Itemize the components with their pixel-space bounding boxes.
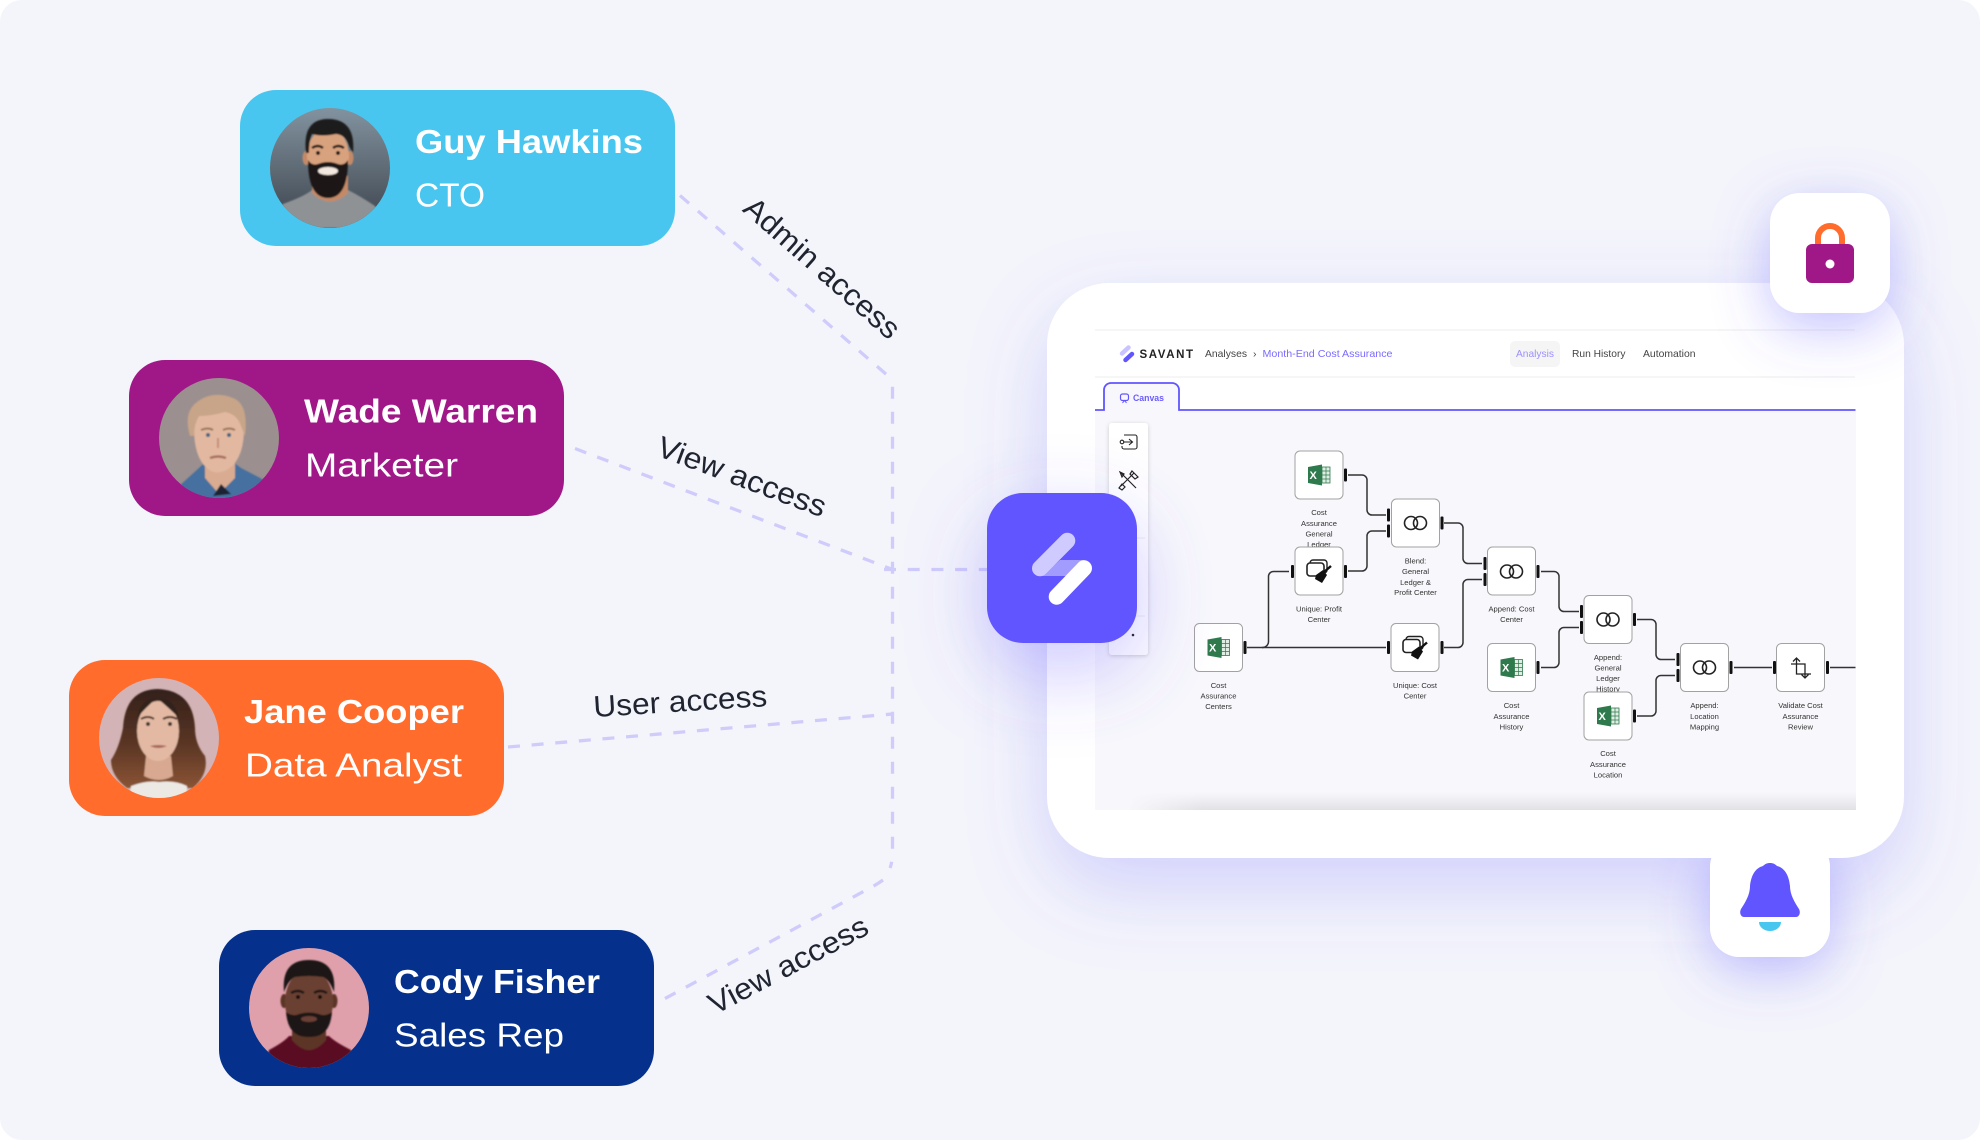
node: cost assurance general ledger: Ledger bbox=[1307, 540, 1331, 549]
canvas area bbox=[1095, 411, 1856, 810]
node: cost assurance general ledger bbox=[1295, 451, 1347, 549]
node: validate cost assurance review bbox=[1773, 644, 1829, 732]
node: cost assurance history: Cost bbox=[1504, 701, 1520, 710]
node: unique profit center bbox=[1291, 547, 1347, 624]
workflow wires bbox=[1247, 475, 1856, 716]
node: blend bbox=[1387, 499, 1444, 597]
panel: app window bbox=[1047, 283, 1904, 858]
node: unique cost center bbox=[1387, 624, 1444, 700]
icon: input bbox=[1120, 435, 1137, 449]
card: Guy Hawkins: CTO bbox=[415, 177, 485, 214]
node: validate cost assurance review: Review bbox=[1788, 722, 1813, 732]
node: append location mapping bbox=[1676, 644, 1732, 732]
node: cost assurance centers bbox=[1194, 624, 1246, 711]
avatar: Guy Hawkins bbox=[270, 108, 390, 228]
node: append cost center: Append: Cost bbox=[1488, 604, 1535, 614]
node: blend: General bbox=[1402, 567, 1429, 576]
icon card: lock bbox=[1770, 193, 1890, 313]
card: Guy Hawkins: Guy Hawkins bbox=[415, 123, 643, 160]
navigation header: Analysis bbox=[1516, 348, 1554, 360]
card: Cody Fisher: Sales Rep bbox=[394, 1017, 564, 1054]
node: cost assurance location: Assurance bbox=[1590, 760, 1626, 769]
icon: tools bbox=[1119, 471, 1138, 490]
node: cost assurance centers: Centers bbox=[1205, 702, 1232, 711]
node: cost assurance history: History bbox=[1500, 722, 1524, 732]
node: append location mapping: Append: bbox=[1690, 701, 1719, 710]
navigation header: Month-End Cost Assurance bbox=[1262, 348, 1393, 360]
bell card shadow bbox=[1710, 837, 1830, 957]
navigation header bbox=[1140, 341, 1696, 367]
node: cost assurance general ledger: Cost bbox=[1311, 508, 1328, 517]
node: unique cost center: Unique: Cost bbox=[1393, 681, 1438, 690]
node: cost assurance centers: Cost bbox=[1211, 681, 1227, 690]
node: append general ledger history: General bbox=[1594, 664, 1622, 672]
card: Guy Hawkins bbox=[240, 90, 675, 246]
node: cost assurance general ledger: X bbox=[1310, 470, 1318, 482]
node: cost assurance general ledger: General bbox=[1305, 530, 1333, 538]
node: unique profit center: Unique: Profit bbox=[1296, 604, 1343, 614]
node: cost assurance location: Location bbox=[1594, 770, 1622, 780]
tab: canvas: Canvas bbox=[1133, 393, 1164, 404]
card: Jane Cooper: Jane Cooper bbox=[244, 693, 464, 730]
icon: savant small logo bbox=[1122, 348, 1132, 360]
node: append cost center bbox=[1484, 547, 1540, 624]
node: cost assurance centers: Assurance bbox=[1201, 692, 1236, 700]
card: Cody Fisher bbox=[219, 930, 654, 1086]
navigation header: Run History bbox=[1572, 348, 1626, 360]
tab: canvas bbox=[1095, 383, 1856, 411]
node: append location mapping: Mapping bbox=[1690, 722, 1719, 732]
dashed connectors bbox=[508, 196, 987, 998]
node: unique profit center: Center bbox=[1308, 615, 1331, 624]
node: cost assurance history: Assurance bbox=[1494, 712, 1529, 721]
navigation header: Analyses bbox=[1205, 348, 1247, 360]
icon card: bell bbox=[1710, 837, 1830, 957]
node: append general ledger history bbox=[1580, 596, 1636, 694]
label: user access: User access bbox=[592, 680, 768, 724]
node: append general ledger history: Ledger bbox=[1596, 674, 1620, 683]
card: Wade Warren: Marketer bbox=[305, 447, 458, 484]
node: append general ledger history: Append: bbox=[1594, 653, 1622, 662]
node: cost assurance location bbox=[1584, 692, 1636, 780]
node: cost assurance general ledger: Assurance bbox=[1301, 519, 1337, 528]
node: cost assurance history: X bbox=[1502, 662, 1510, 674]
node: validate cost assurance review: Assurance bbox=[1783, 712, 1818, 721]
node: blend: Ledger & bbox=[1400, 578, 1431, 587]
node: blend: Blend: bbox=[1405, 556, 1426, 566]
node: validate cost assurance review: Validate Cost bbox=[1778, 701, 1824, 710]
navigation header: Automation bbox=[1643, 348, 1696, 360]
navigation header: SAVANT bbox=[1140, 349, 1193, 361]
card: Wade Warren: Wade Warren bbox=[304, 393, 538, 430]
avatar: Cody Fisher bbox=[249, 948, 369, 1070]
label: view access (sales): View access bbox=[703, 910, 874, 1021]
node: cost assurance history bbox=[1488, 644, 1540, 732]
toolbar bbox=[1109, 423, 1148, 655]
node: append general ledger history: History bbox=[1596, 684, 1620, 694]
icon: savant logo tile bbox=[987, 493, 1137, 643]
node: cost assurance centers: X bbox=[1209, 642, 1217, 654]
label: view access (marketer): View access bbox=[653, 431, 831, 524]
node: append cost center: Center bbox=[1500, 615, 1523, 624]
navigation header: › bbox=[1253, 348, 1257, 360]
card: Jane Cooper: Data Analyst bbox=[245, 747, 462, 784]
card: Wade Warren bbox=[129, 360, 564, 516]
avatar: Wade Warren bbox=[159, 378, 279, 500]
node: unique cost center: Center bbox=[1404, 692, 1427, 700]
node: blend: Profit Center bbox=[1394, 588, 1437, 597]
card: Jane Cooper bbox=[69, 660, 504, 816]
card: Cody Fisher: Cody Fisher bbox=[394, 963, 600, 1000]
avatar: Jane Cooper bbox=[99, 678, 219, 800]
label: admin access: Admin access bbox=[737, 191, 906, 346]
node: cost assurance location: X bbox=[1598, 711, 1606, 723]
node: cost assurance location: Cost bbox=[1600, 749, 1617, 758]
node: append location mapping: Location bbox=[1690, 712, 1719, 721]
